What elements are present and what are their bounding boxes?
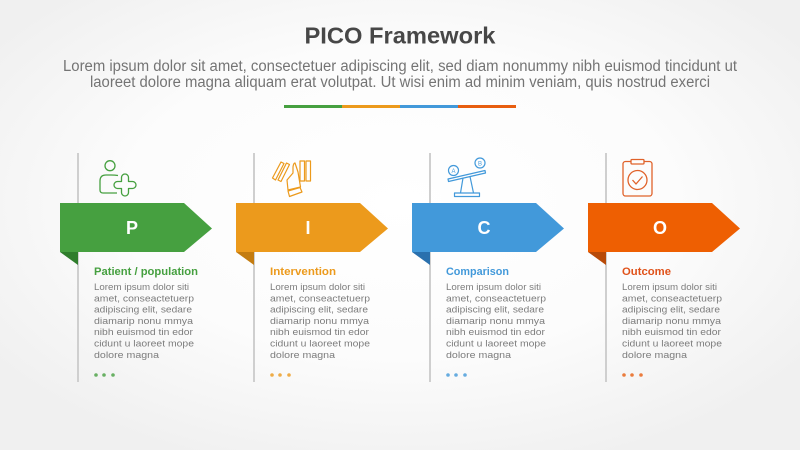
body text: diamarip nonu mmya [622, 316, 722, 327]
body text: cidunt u laoreet mope [270, 338, 370, 350]
body text: Lorem ipsum dolor siti [446, 282, 541, 293]
panel: C Comparison [412, 153, 564, 382]
body text: diamarip nonu mmya [94, 316, 194, 327]
intro text: Lorem ipsum dolor sit amet, consectetuer adipiscing elit, sed diam nonummy nibh euismod tincidunt ut [63, 58, 738, 75]
body text: dolore magna [94, 350, 160, 361]
body text: cidunt u laoreet mope [446, 338, 546, 350]
body text: dolore magna [622, 350, 688, 361]
body text: dolore magna [446, 350, 512, 361]
panel: I Intervention [236, 153, 388, 382]
body text: Lorem ipsum dolor siti [94, 282, 189, 293]
dots [270, 373, 291, 377]
heading: Outcome [622, 266, 671, 278]
body text: Lorem ipsum dolor siti [622, 282, 717, 293]
body text: adipiscing elit, sedare [446, 305, 544, 316]
arrow banner: P [60, 203, 212, 265]
intro text [63, 58, 738, 91]
dots [622, 373, 643, 377]
arrow banner: C [412, 203, 564, 265]
panel: O Outcome [588, 153, 740, 382]
body text: amet, conseactetuerp [94, 293, 194, 304]
icon: hand choosing among bars [272, 161, 310, 196]
panel: C Comparison: A [451, 169, 456, 175]
body text: amet, conseactetuerp [270, 293, 370, 304]
title: PICO Framework [304, 22, 496, 48]
title divider: four-colour bar [284, 105, 516, 108]
body text: adipiscing elit, sedare [622, 305, 720, 316]
body text: cidunt u laoreet mope [94, 338, 194, 350]
heading: Patient / population [94, 266, 198, 278]
arrow banner: I [236, 203, 388, 265]
body text: nibh euismod tin edor [446, 327, 546, 338]
icon: seesaw comparing A and B [448, 158, 486, 196]
body text: adipiscing elit, sedare [94, 305, 192, 316]
arrow banner: I: I [305, 218, 311, 238]
body text: nibh euismod tin edor [94, 327, 194, 338]
body text: amet, conseactetuerp [622, 293, 722, 304]
icon: patient with medical cross [100, 161, 136, 196]
body text: dolore magna [270, 350, 336, 361]
arrow banner: C: C [478, 218, 490, 238]
body text: Lorem ipsum dolor siti [270, 282, 365, 293]
body text: amet, conseactetuerp [446, 293, 546, 304]
heading: Comparison [446, 266, 509, 278]
intro text: laoreet dolore magna aliquam erat volutpat. Ut wisi enim ad minim veniam, quis nostrud exerci [90, 74, 710, 91]
body text: nibh euismod tin edor [270, 327, 370, 338]
body text: cidunt u laoreet mope [622, 338, 722, 350]
arrow banner: O [588, 203, 740, 265]
body text: nibh euismod tin edor [622, 327, 722, 338]
panel: C Comparison: B [478, 162, 482, 168]
panel: P Patient / population [60, 153, 212, 382]
dots [446, 373, 467, 377]
body text: diamarip nonu mmya [270, 316, 370, 327]
body text: diamarip nonu mmya [446, 316, 546, 327]
arrow banner: O: O [653, 218, 667, 238]
body text: adipiscing elit, sedare [270, 305, 368, 316]
icon: clipboard with check [623, 160, 652, 196]
arrow banner: P: P [126, 218, 138, 238]
heading: Intervention [270, 266, 336, 278]
dots [94, 373, 115, 377]
